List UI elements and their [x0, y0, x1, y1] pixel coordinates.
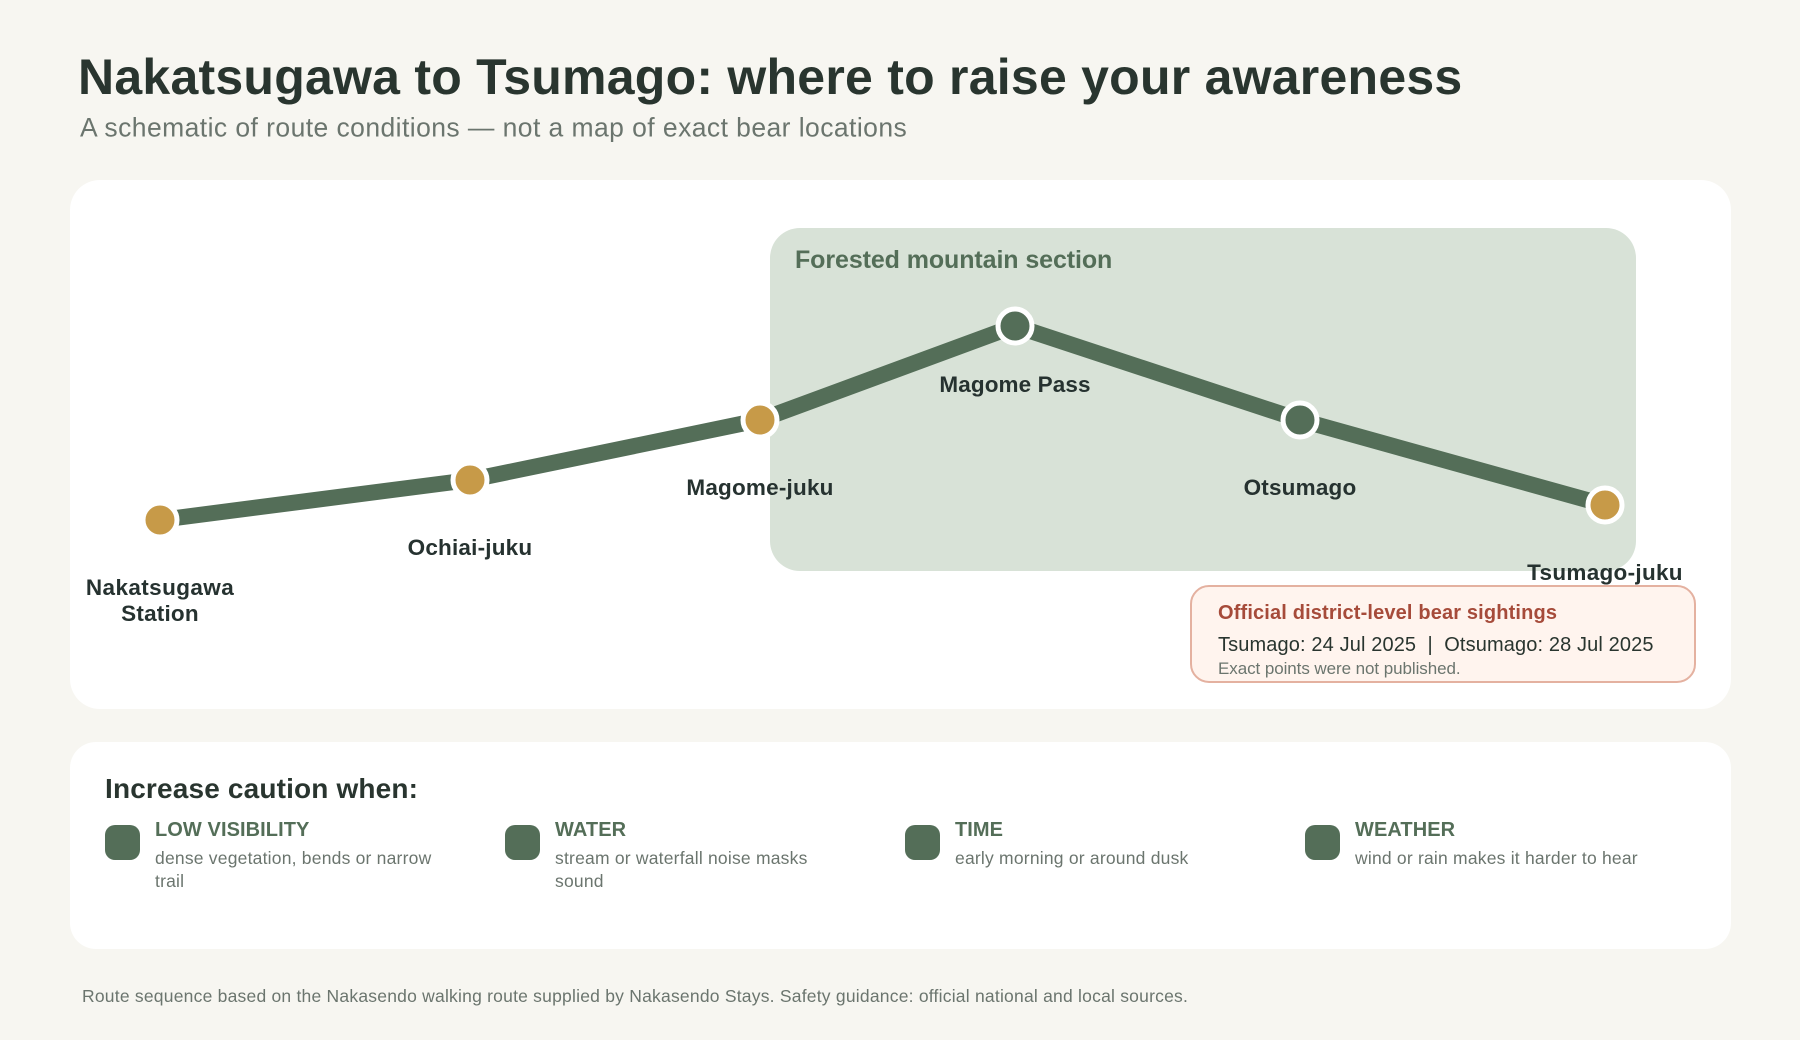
- item: low visibility: dense vegetation, bends or narrow: [155, 848, 432, 868]
- heading: Increase caution when:: [105, 773, 418, 804]
- item: water: stream or waterfall noise masks: [555, 848, 808, 868]
- item: low visibility: trail: [155, 871, 184, 891]
- callout: bear sightings: Exact points were not published.: [1218, 659, 1461, 678]
- stop: Magome Pass: Magome Pass: [939, 372, 1091, 397]
- item: weather: WEATHER: [1355, 819, 1456, 841]
- stop: Ochiai-juku: Ochiai-juku: [408, 535, 532, 560]
- stop: Otsumago: Otsumago: [1244, 475, 1356, 500]
- panel: route: [70, 180, 1731, 709]
- stop: Nakatsugawa Station: Nakatsugawa: [86, 575, 234, 600]
- item: water: sound: [555, 871, 604, 891]
- item: water: [505, 819, 808, 891]
- title: Nakatsugawa to Tsumago: where to raise your awareness: [78, 49, 1462, 105]
- stop: Tsumago-juku: [1527, 488, 1683, 585]
- item: weather: wind or rain makes it harder to hear: [1354, 848, 1638, 868]
- item: low visibility: LOW VISIBILITY: [155, 819, 310, 841]
- footer source note: Route sequence based on the Nakasendo walking route supplied by Nakasendo Stays. Safety guidance: official national and local sources.: [82, 986, 1188, 1006]
- stop: Magome-juku: [686, 403, 834, 500]
- stop: Otsumago: [1244, 403, 1356, 500]
- item: weather: [1305, 819, 1638, 868]
- stop: Ochiai-juku: [408, 463, 532, 560]
- forested mountain section: Forested mountain section: [795, 246, 1112, 274]
- item: time: TIME: [955, 819, 1003, 841]
- stop: Tsumago-juku: Tsumago-juku: [1527, 560, 1683, 585]
- route line: [160, 326, 1605, 520]
- item: time: early morning or around dusk: [955, 848, 1189, 868]
- stop: Magome Pass: [939, 309, 1091, 397]
- forested mountain section: [770, 228, 1636, 571]
- item: water: WATER: [555, 819, 627, 841]
- callout: bear sightings: [1191, 586, 1695, 682]
- stop: Nakatsugawa Station: [86, 503, 234, 626]
- panel: increase caution: [70, 742, 1731, 949]
- stop: Magome-juku: Magome-juku: [686, 475, 834, 500]
- stop: Nakatsugawa Station: Station: [121, 601, 199, 626]
- item: low visibility: [105, 819, 432, 891]
- item: time: [905, 819, 1189, 868]
- callout: bear sightings: Tsumago: 24 Jul 2025 | Otsumago: 28 Jul 2025: [1218, 634, 1654, 656]
- subtitle: A schematic of route conditions — not a map of exact bear locations: [80, 112, 907, 142]
- callout: bear sightings: Official district-level bear sightings: [1218, 602, 1557, 624]
